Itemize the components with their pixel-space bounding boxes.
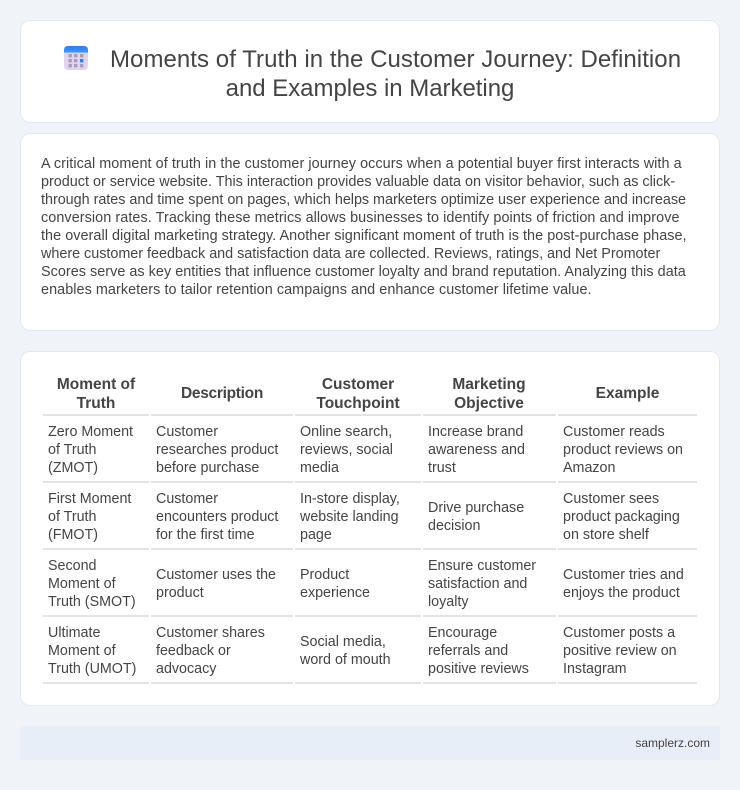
row: FMOT: Customer [156, 491, 218, 507]
row: UMOT: Instagram [563, 661, 627, 677]
icon: calendar [64, 46, 88, 70]
intro panel [20, 133, 720, 331]
row: ZMOT: Amazon [563, 460, 615, 476]
row: FMOT: decision [428, 518, 480, 534]
row: FMOT: encounters product [156, 509, 278, 525]
row: FMOT: First Moment [48, 491, 131, 507]
row: FMOT: of Truth [48, 509, 96, 525]
row: SMOT: Customer tries and [563, 567, 684, 583]
row: ZMOT: Increase brand [428, 424, 523, 440]
row: FMOT: page [300, 527, 332, 543]
row: ZMOT: product reviews on [563, 442, 683, 458]
row: ZMOT: researches product [156, 442, 278, 458]
row: SMOT: Ensure customer [428, 558, 536, 574]
row: UMOT: Ultimate [48, 625, 100, 641]
row: UMOT: Customer shares [156, 625, 265, 641]
row: UMOT: positive reviews [428, 661, 529, 677]
row: ZMOT: Customer reads [563, 424, 665, 440]
row: SMOT: satisfaction and [428, 576, 527, 592]
row: ZMOT: Online search, [300, 424, 392, 440]
row: SMOT [48, 558, 684, 610]
table [43, 376, 697, 684]
row: SMOT: experience [300, 585, 370, 601]
row: UMOT: Social media, [300, 634, 386, 650]
row: UMOT: positive review on [563, 643, 677, 659]
footer bar [20, 726, 720, 760]
row: UMOT: Customer posts a [563, 625, 675, 641]
row: SMOT: Product [300, 567, 349, 583]
table header: Objective [454, 395, 524, 412]
row: SMOT: product [156, 585, 204, 601]
row: ZMOT: before purchase [156, 460, 259, 476]
row: ZMOT: awareness and [428, 442, 525, 458]
intro text: A critical moment of truth in the customer journey occurs when a potential buyer first interacts with a [41, 156, 682, 172]
row: FMOT: website landing [300, 509, 399, 525]
row: SMOT: Truth (SMOT) [48, 594, 136, 610]
row: UMOT: feedback or [156, 643, 231, 659]
intro text [41, 156, 687, 298]
intro text: Scores serve as key entities that influence customer loyalty and brand reputation. Analyzing this data [41, 264, 686, 280]
table header: Example [596, 385, 659, 402]
row: ZMOT: media [300, 460, 339, 476]
row: FMOT: for the first time [156, 527, 255, 543]
footer text: samplerz.com [635, 736, 710, 750]
row: ZMOT: trust [428, 460, 456, 476]
title [110, 46, 681, 102]
table header: Description [181, 385, 263, 402]
row: SMOT: Customer uses the [156, 567, 276, 583]
intro text: enables marketers to tailor retention campaigns and enhance customer lifetime value. [41, 282, 592, 298]
intro text: product or service website. This interaction provides valuable data on visitor behavior, such as click- [41, 174, 675, 190]
row: UMOT: advocacy [156, 661, 216, 677]
row: SMOT: Moment of [48, 576, 116, 592]
row: ZMOT [48, 424, 683, 476]
row: FMOT [48, 491, 680, 543]
row: ZMOT: Customer [156, 424, 218, 440]
row: UMOT: Encourage [428, 625, 497, 641]
row: UMOT [48, 625, 677, 677]
row: ZMOT: reviews, social [300, 442, 393, 458]
intro text: where customer feedback and satisfaction data are collected. Reviews, ratings, and Net Promoter [41, 246, 660, 262]
row: FMOT: on store shelf [563, 527, 649, 543]
table header: Touchpoint [316, 395, 400, 412]
title: and Examples in Marketing [226, 75, 514, 102]
row: ZMOT: Zero Moment [48, 424, 133, 440]
row: SMOT: loyalty [428, 594, 469, 610]
row: ZMOT: (ZMOT) [48, 460, 98, 476]
row: SMOT: enjoys the product [563, 585, 680, 601]
row: FMOT: In-store display, [300, 491, 400, 507]
intro text: through rates and time spent on pages, which helps marketers optimize user experience and increase [41, 192, 686, 208]
row: FMOT: product packaging [563, 509, 680, 525]
row: FMOT: Customer sees [563, 491, 659, 507]
table header [57, 376, 659, 412]
row: UMOT: word of mouth [300, 652, 391, 668]
table header: Marketing [452, 376, 526, 393]
row: UMOT: Moment of [48, 643, 116, 659]
row: SMOT: Second [48, 558, 96, 574]
title: Moments of Truth in the Customer Journey: Definition [110, 46, 681, 73]
intro text: the overall digital marketing strategy. Another significant moment of truth is the post-purchase phase, [41, 228, 687, 244]
table header: Moment of [57, 376, 135, 393]
header panel [20, 20, 720, 123]
table header: Truth [77, 395, 115, 412]
intro text: conversion rates. Tracking these metrics allows businesses to identify points of friction and improve [41, 210, 680, 226]
row: UMOT: Truth (UMOT) [48, 661, 136, 677]
row: FMOT: Drive purchase [428, 500, 524, 516]
row: UMOT: referrals and [428, 643, 508, 659]
table panel [20, 351, 720, 706]
table header: Customer [322, 376, 394, 393]
row: FMOT: (FMOT) [48, 527, 98, 543]
row: ZMOT: of Truth [48, 442, 96, 458]
